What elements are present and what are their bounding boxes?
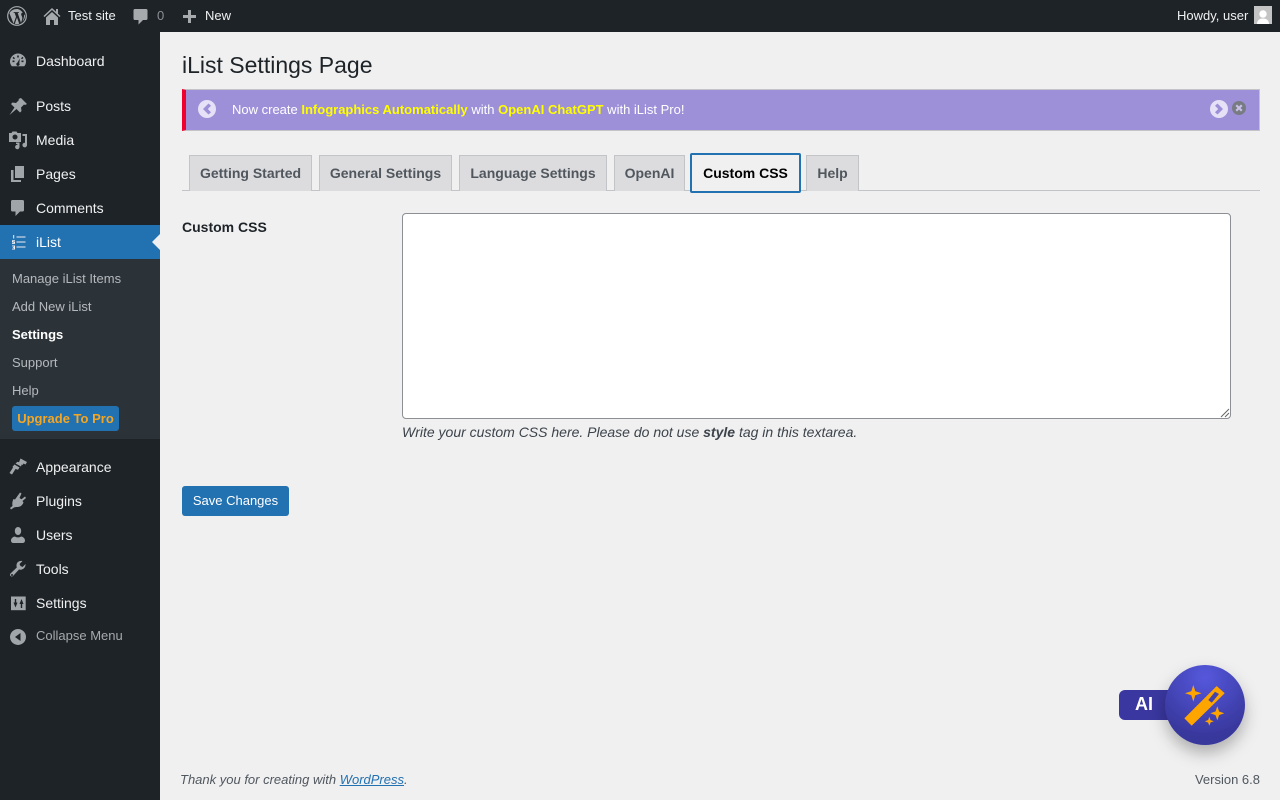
sidebar menu <box>0 32 160 800</box>
submenu: Manage iList Items: Manage iList Items <box>12 271 121 286</box>
menu: Posts: Posts <box>36 98 71 114</box>
submenu: Upgrade To Pro <box>12 406 119 431</box>
tab: Language Settings <box>459 155 607 191</box>
site name: Test site <box>68 8 116 23</box>
icon: settings <box>11 596 26 610</box>
tab: OpenAI <box>614 155 685 191</box>
promo notice banner <box>182 89 1260 131</box>
label: iList <box>36 234 61 250</box>
active arrow <box>152 234 160 250</box>
icon: users <box>11 527 25 543</box>
tab bar <box>182 155 1260 191</box>
menu: Media: Media <box>36 132 74 148</box>
menu: Dashboard: Dashboard <box>36 53 104 69</box>
comment count: 0 <box>157 8 164 23</box>
icon: WordPress logo <box>7 6 27 26</box>
icon: tools <box>10 560 26 576</box>
icon: magic wand circle <box>1157 664 1254 762</box>
icon: close <box>1232 101 1246 115</box>
menu: Users: Users <box>36 527 73 543</box>
submenu: Support: Support <box>12 355 58 370</box>
AI label pill: AI <box>1135 694 1153 714</box>
icon: comments <box>11 200 24 216</box>
menu: Comments: Comments <box>36 200 104 216</box>
icon: user avatar <box>1254 6 1272 24</box>
field label: Custom CSS <box>182 219 267 235</box>
icon: previous arrow <box>198 100 216 118</box>
icon: pages <box>11 166 24 182</box>
field description: Write your custom CSS here. Please do not use style tag in this textarea. <box>402 424 857 440</box>
tab: Getting Started: Getting Started <box>200 165 301 181</box>
submenu: Help: Help <box>12 383 39 398</box>
menu: Collapse Menu: Collapse Menu <box>36 628 123 643</box>
AI floating button <box>1119 664 1254 762</box>
page title: iList Settings Page <box>182 52 373 78</box>
new link: New <box>205 8 231 23</box>
icon: collapse menu <box>10 629 26 645</box>
icon: next arrow <box>1210 100 1228 118</box>
custom CSS textarea <box>402 213 1231 419</box>
submenu: Upgrade To Pro: Upgrade To Pro <box>17 411 114 426</box>
icon: comments <box>134 9 148 24</box>
icon: dashboard <box>10 54 26 66</box>
submenu: Add New iList: Add New iList <box>12 299 91 314</box>
save changes button <box>182 486 289 516</box>
greeting: Howdy, user <box>1177 8 1248 23</box>
footer version: Version 6.8 <box>1195 772 1260 787</box>
icon: home <box>44 8 60 25</box>
save changes button: Save Changes <box>193 493 278 508</box>
menu: Appearance: Appearance <box>36 459 112 475</box>
top admin bar <box>0 0 1280 32</box>
submenu: Settings: Settings <box>12 327 63 342</box>
footer thanks text: Thank you for creating with WordPress. <box>180 772 408 787</box>
tab: OpenAI: OpenAI <box>625 165 674 181</box>
tab: Custom CSS active <box>690 153 801 193</box>
AI label pill <box>1119 690 1179 720</box>
submenu <box>0 259 160 439</box>
tab: Help: Help <box>817 165 848 181</box>
menu: Tools: Tools <box>36 561 69 577</box>
menu: iList active item <box>0 225 160 259</box>
notice text: Now create Infographics Automatically with OpenAI ChatGPT with iList Pro! <box>232 102 684 117</box>
icon: plugins <box>10 492 26 510</box>
icon: plus <box>183 10 196 23</box>
menu: Pages: Pages <box>36 166 76 182</box>
menu: Plugins: Plugins <box>36 493 82 509</box>
tab: General Settings: General Settings <box>330 165 441 181</box>
icon: numbered list <box>12 235 26 250</box>
icon: pin <box>10 98 27 115</box>
menu: Settings: Settings <box>36 595 87 611</box>
resize handle <box>1220 408 1230 418</box>
tab: Getting Started <box>189 155 312 191</box>
icon: appearance <box>10 458 27 474</box>
tab: General Settings <box>319 155 452 191</box>
tab: Help <box>806 155 859 191</box>
tab: Custom CSS active: Custom CSS <box>703 165 788 181</box>
icon: media <box>9 132 27 150</box>
tab: Language Settings: Language Settings <box>470 165 596 181</box>
